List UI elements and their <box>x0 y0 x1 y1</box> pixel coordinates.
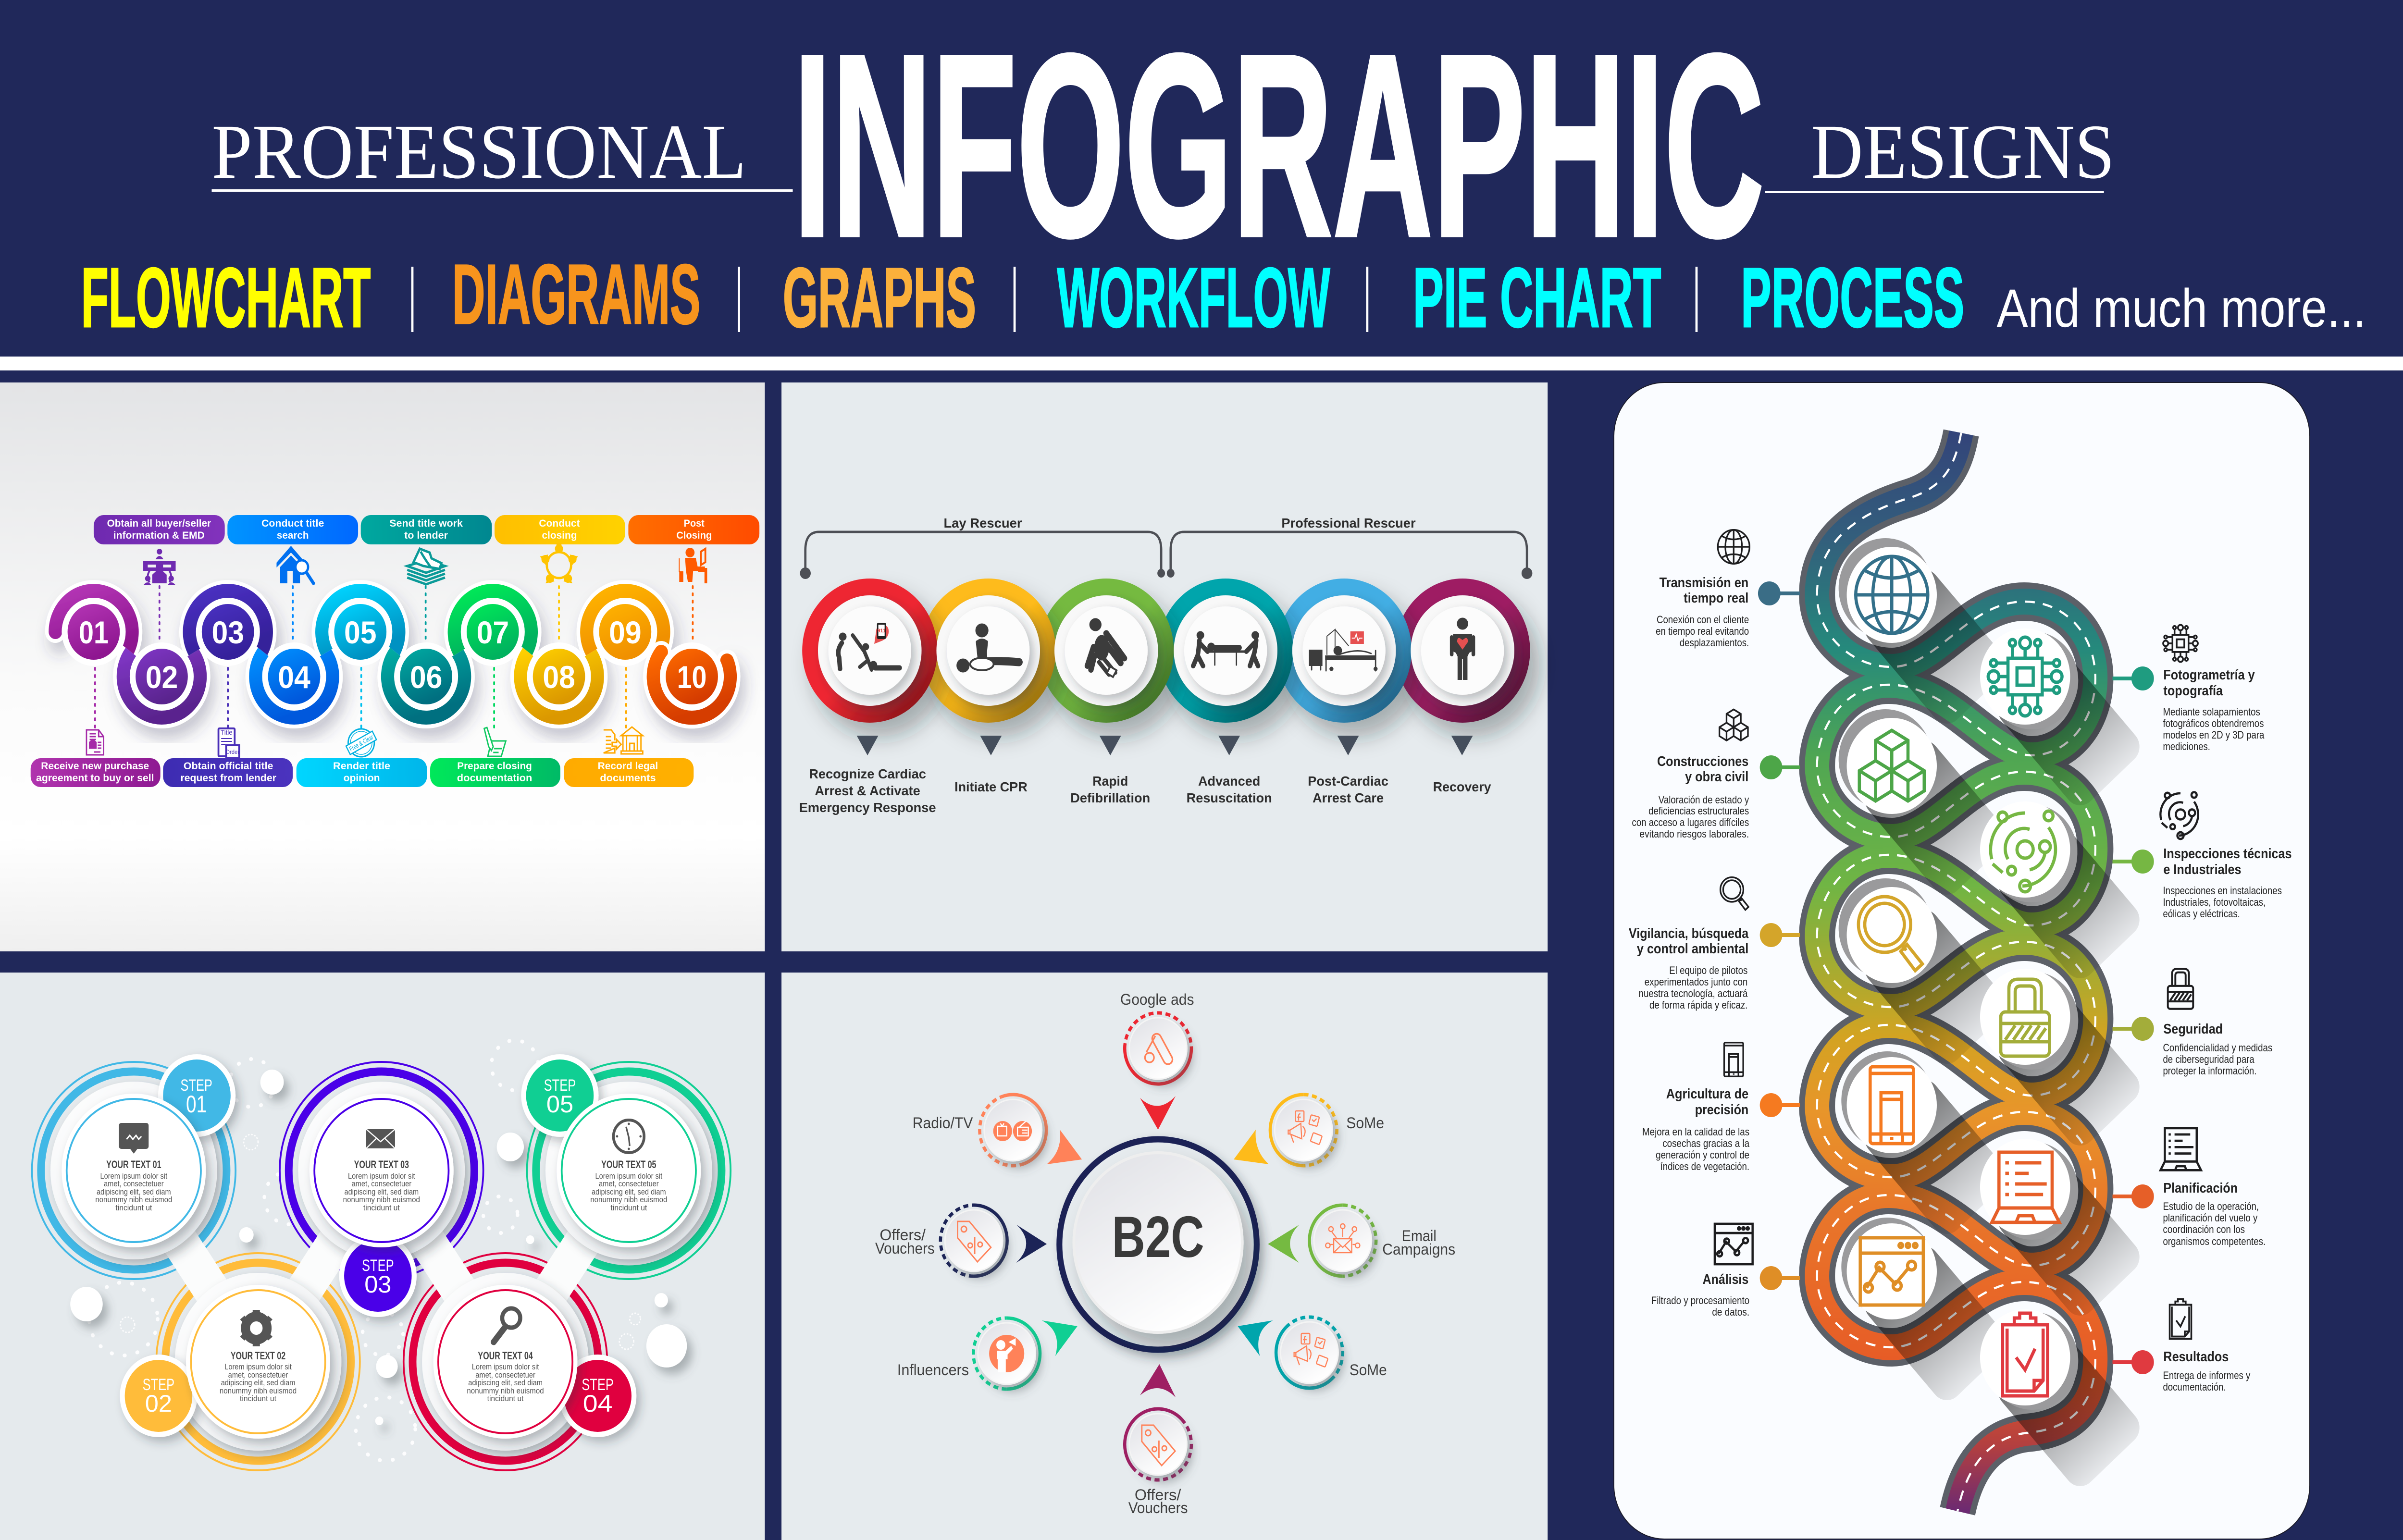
text: Inspecciones técnicas e Industriales: Industriales, fotovoltaicas, <box>2163 896 2266 908</box>
text: Inspecciones técnicas e Industriales: Inspecciones en instalaciones <box>2163 885 2282 897</box>
text: Fotogrametría y topografía: mediciones. <box>2163 740 2210 752</box>
text block 03: adipiscing elit, sed diam <box>344 1188 419 1196</box>
text: Transmisión en tiempo real: Transmisión en <box>1660 575 1748 590</box>
text block 05: adipiscing elit, sed diam <box>592 1188 666 1196</box>
step labels: Defibrillation <box>1070 790 1150 805</box>
icon: purchase agreement document <box>87 730 104 755</box>
badge labels <box>143 1076 614 1417</box>
text: Agricultura de precisión <box>1642 1086 1749 1172</box>
badge labels: 05 <box>546 1091 573 1118</box>
icon: padlock large <box>2001 979 2049 1056</box>
icon: globe large <box>1856 556 1928 633</box>
numbered step discs: 10 <box>677 659 706 695</box>
text block 03: amet, consectetuer <box>351 1180 412 1188</box>
icon: chat bubble <box>119 1123 149 1154</box>
text: Planificación: planificación del vuelo y <box>2163 1212 2258 1224</box>
panel: chain of survival <box>781 382 1548 951</box>
icon: rapid defibrillation <box>1087 618 1124 677</box>
bottom step pills: Prepare closing <box>457 761 532 772</box>
header banner <box>81 0 2366 345</box>
top step pills <box>94 515 759 544</box>
numbered step discs: 09 <box>609 615 642 650</box>
top step pills: Post <box>684 518 705 529</box>
top step pills: closing <box>542 530 577 541</box>
text: Vigilancia, búsqueda y control ambiental: Vigilancia, búsqueda <box>1629 925 1749 941</box>
badge labels: 01 <box>186 1091 207 1118</box>
text: Fotogrametría y topografía: Mediante solapamientos <box>2163 706 2260 718</box>
step labels: Arrest Care <box>1313 790 1384 805</box>
text block 01: nonummy nibh euismod <box>95 1195 172 1204</box>
text: Construcciones y obra civil: Construcciones <box>1657 753 1748 769</box>
channel labels: Offers/ <box>879 1226 926 1244</box>
numbered step discs: 03 <box>211 615 244 650</box>
icon: magnifier <box>494 1308 520 1342</box>
text block 01: Lorem ipsum dolor sit <box>100 1172 168 1181</box>
text block 05 <box>590 1158 667 1212</box>
text block 02: YOUR TEXT 02 <box>231 1350 285 1362</box>
text block 01: adipiscing elit, sed diam <box>97 1188 171 1196</box>
icon: chart large <box>1860 1238 1923 1305</box>
text block 04: adipiscing elit, sed diam <box>468 1379 543 1387</box>
panel: B2C channels <box>781 973 1548 1540</box>
white icon discs <box>1839 538 2078 1410</box>
text: Inspecciones técnicas e Industriales <box>2163 846 2292 920</box>
step labels: Initiate CPR <box>954 779 1028 794</box>
text: Transmisión en tiempo real: Conexión con el cliente <box>1657 614 1749 626</box>
down arrows <box>857 736 1473 755</box>
text: Agricultura de precisión: generación y control de <box>1656 1149 1749 1161</box>
bottom step pills: request from lender <box>180 773 276 784</box>
numbered step discs: 07 <box>477 615 509 650</box>
text block 04: YOUR TEXT 04 <box>478 1350 533 1362</box>
icon: house with magnifier <box>276 546 313 583</box>
text: Planificación: organismos competentes. <box>2163 1235 2266 1247</box>
decorative dots and dashed rings <box>70 1040 687 1461</box>
text block 02: amet, consectetuer <box>228 1371 288 1380</box>
icon: round table meeting <box>540 543 578 583</box>
icon: recovered person with heart <box>1452 618 1474 679</box>
panel: five step circles <box>0 973 765 1540</box>
text block 03: Lorem ipsum dolor sit <box>348 1172 415 1181</box>
text: Construcciones y obra civil <box>1632 753 1749 840</box>
icon: title and order documents <box>219 728 239 758</box>
text: Transmisión en tiempo real: en tiempo real evitando <box>1656 625 1749 637</box>
text: Construcciones y obra civil: y obra civil <box>1685 769 1748 784</box>
text block 05: amet, consectetuer <box>599 1180 659 1188</box>
central B2C hub <box>1059 1139 1257 1350</box>
icon: clipboard large <box>2003 1313 2048 1396</box>
text block 02 <box>220 1350 297 1403</box>
badge labels: STEP <box>582 1375 614 1393</box>
text block 02: tincidunt ut <box>240 1394 276 1403</box>
top step pills: Conduct title <box>261 518 324 529</box>
text: Agricultura de precisión: precisión <box>1695 1102 1748 1117</box>
channel labels: Influencers <box>897 1361 969 1379</box>
top step pills: to lender <box>404 530 448 541</box>
small outline icons <box>1715 530 2201 1339</box>
text: Vigilancia, búsqueda y control ambiental: experimentados junto con <box>1645 976 1747 988</box>
text: Agricultura de precisión: Agricultura de <box>1666 1086 1748 1101</box>
text: Resultados <box>2163 1349 2251 1393</box>
icon: magnifier large <box>1858 897 1922 971</box>
bottom step pills: documentation <box>457 773 532 784</box>
text: Resultados: documentación. <box>2163 1381 2226 1393</box>
text block 05: tincidunt ut <box>610 1204 647 1212</box>
text block 05: Lorem ipsum dolor sit <box>595 1172 663 1181</box>
icon: free and clear stamp: Free & Clear <box>348 733 375 753</box>
step labels: Resuscitation <box>1187 790 1272 805</box>
text: Transmisión en tiempo real <box>1656 575 1749 649</box>
step badges <box>120 1054 636 1437</box>
text: Fotogrametría y topografía: topografía <box>2163 683 2223 698</box>
text: Vigilancia, búsqueda y control ambiental: nuestra tecnología, actuará <box>1639 987 1747 999</box>
bottom step pills: documents <box>600 773 656 784</box>
text: Vigilancia, búsqueda y control ambiental: y control ambiental <box>1637 941 1748 956</box>
top step pills: search <box>277 530 309 541</box>
icon: stack of paper and money <box>407 549 445 584</box>
top step pills: Conduct <box>539 518 580 529</box>
bottom step pills: Obtain official title <box>184 761 273 772</box>
text: Agricultura de precisión: cosechas gracias a la <box>1662 1137 1749 1149</box>
icon: meeting over house <box>143 549 176 585</box>
badge labels: 02 <box>145 1391 172 1417</box>
text: Fotogrametría y topografía: modelos en 2D y 3D para <box>2163 729 2264 741</box>
badge labels: STEP <box>544 1076 576 1094</box>
text block 03 <box>343 1158 420 1212</box>
panel: road infographic card <box>1614 382 2310 1539</box>
badge labels: 04 <box>583 1391 613 1417</box>
text: Fotogrametría y topografía: fotográficos obtendremos <box>2163 717 2264 729</box>
text block 05: YOUR TEXT 05 <box>601 1158 656 1170</box>
coloured step rings <box>802 579 1530 723</box>
icon: orbit large <box>1991 811 2056 892</box>
text: Inspecciones técnicas e Industriales: e Industriales <box>2163 862 2242 877</box>
icon: title and order documents: Order <box>225 749 239 755</box>
badge labels: 03 <box>364 1271 391 1298</box>
icon: title and order documents: Title <box>221 729 233 736</box>
node: Influencers <box>973 1318 1040 1389</box>
step labels: Post-Cardiac <box>1308 773 1388 788</box>
white plates <box>818 595 1514 706</box>
numbered step discs <box>62 598 724 711</box>
text block 03: nonummy nibh euismod <box>343 1195 420 1204</box>
text block 04: Lorem ipsum dolor sit <box>472 1363 539 1371</box>
dotted leader lines <box>95 586 693 727</box>
text: Vigilancia, búsqueda y control ambiental <box>1629 925 1749 1011</box>
text: Análisis: de datos. <box>1712 1306 1749 1318</box>
text: Seguridad <box>2163 1021 2272 1077</box>
channel labels: Campaigns <box>1382 1241 1455 1258</box>
text block 04: amet, consectetuer <box>475 1371 535 1380</box>
category: WORKFLOW: WORKFLOW <box>1057 251 1330 345</box>
icon: gear <box>240 1310 273 1346</box>
text: Seguridad: de ciberseguridad para <box>2163 1053 2254 1065</box>
text: Seguridad: proteger la información. <box>2163 1065 2256 1077</box>
icon: clock <box>613 1120 644 1153</box>
text: Construcciones y obra civil: con acceso a lugares difíciles <box>1632 816 1749 828</box>
text: Inspecciones técnicas e Industriales: Inspecciones técnicas <box>2163 846 2292 861</box>
connector dots <box>1758 581 2154 1374</box>
icon: laptop large <box>1992 1152 2059 1222</box>
text block 02: nonummy nibh euismod <box>220 1387 297 1395</box>
node: Google ads <box>1125 1013 1191 1084</box>
text: Fotogrametría y topografía: Fotogrametría y <box>2163 667 2255 682</box>
text: Planificación: Estudio de la operación, <box>2163 1200 2259 1212</box>
panel: ten-step flowchart <box>0 382 765 951</box>
text: Planificación: coordinación con los <box>2163 1223 2245 1235</box>
inner white circles with outlines <box>62 1094 701 1439</box>
text block 04 <box>467 1350 544 1403</box>
step labels <box>799 766 1491 815</box>
icon: free and clear stamp <box>346 729 376 757</box>
category: DIAGRAMS: DIAGRAMS <box>452 247 700 342</box>
step labels: Rapid <box>1092 773 1128 788</box>
bottom step pills: Render title <box>333 761 390 772</box>
white connectors <box>134 1170 629 1362</box>
text: Seguridad: Confidencialidad y medidas <box>2163 1042 2272 1054</box>
text: Vigilancia, búsqueda y control ambiental: de forma rápida y eficaz. <box>1649 999 1747 1011</box>
text: Transmisión en tiempo real: desplazamientos. <box>1680 637 1749 649</box>
text: Transmisión en tiempo real: tiempo real <box>1684 590 1748 605</box>
icon: pen signing paper <box>484 727 506 756</box>
channel labels: Vouchers <box>875 1240 935 1257</box>
step labels: Recognize Cardiac <box>809 766 926 781</box>
channel labels: Vouchers <box>1128 1499 1188 1516</box>
icon: stretcher <box>1193 631 1259 666</box>
central B2C hub: B2C <box>1112 1205 1204 1270</box>
icon: cubes large <box>1859 730 1924 801</box>
bottom step pills: Record legal <box>598 761 658 772</box>
title right: DESIGNS: DESIGNS <box>1811 109 2115 195</box>
step labels: Emergency Response <box>799 800 936 815</box>
step labels: Recovery <box>1433 779 1491 794</box>
text: Construcciones y obra civil: deficiencias estructurales <box>1648 805 1749 817</box>
text block 03: YOUR TEXT 03 <box>354 1158 409 1170</box>
winding road <box>1817 433 2095 1511</box>
icon: person at desk <box>679 548 707 583</box>
node: SoMe upper <box>1270 1095 1337 1166</box>
category: FLOWCHART: FLOWCHART <box>81 251 371 345</box>
numbered step discs: 04 <box>278 659 310 695</box>
text block 04: nonummy nibh euismod <box>467 1387 544 1395</box>
icon: CPR <box>957 624 1019 672</box>
outer plates <box>50 1082 712 1451</box>
icon: recognize cardiac arrest <box>838 623 900 670</box>
bracket: lay rescuer: Lay Rescuer <box>943 515 1022 530</box>
channel labels: Radio/TV <box>913 1114 973 1132</box>
bracket: professional rescuer <box>1167 515 1532 579</box>
channel labels: SoMe <box>1346 1114 1384 1132</box>
text block 03: tincidunt ut <box>363 1204 400 1212</box>
category: GRAPHS: GRAPHS <box>783 251 976 345</box>
text block 04: tincidunt ut <box>487 1394 524 1403</box>
text: Agricultura de precisión: Mejora en la calidad de las <box>1642 1126 1749 1138</box>
text: Análisis <box>1651 1271 1749 1318</box>
step labels: Advanced <box>1198 773 1260 788</box>
channel labels: Email <box>1402 1227 1437 1244</box>
icon: tablet large <box>1870 1067 1913 1144</box>
bracket: professional rescuer: Professional Rescuer <box>1281 515 1416 530</box>
title left: PROFESSIONAL: PROFESSIONAL <box>211 109 746 195</box>
serpentine ring ribbon <box>55 591 730 717</box>
top step pills: Send title work <box>389 518 463 529</box>
text block 02: adipiscing elit, sed diam <box>221 1379 295 1387</box>
channel labels: Google ads <box>1120 991 1194 1008</box>
step labels: Arrest & Activate <box>815 783 920 798</box>
icon: recognize cardiac arrest: 911 <box>878 628 885 634</box>
text: Resultados: Resultados <box>2163 1349 2229 1364</box>
icon: document to court house <box>604 727 643 754</box>
text: Inspecciones técnicas e Industriales: eólicas y eléctricas. <box>2163 908 2240 920</box>
text: Seguridad: Seguridad <box>2163 1021 2223 1036</box>
node: Radio/TV <box>970 1084 1056 1176</box>
coloured double rings <box>32 1062 731 1470</box>
channel labels <box>875 991 1455 1516</box>
bottom step pills: opinion <box>344 773 380 784</box>
numbered step discs: 08 <box>543 659 575 695</box>
node: Offers/Vouchers bottom <box>1111 1394 1205 1495</box>
text: Planificación <box>2163 1180 2266 1247</box>
text: Resultados: Entrega de informes y <box>2163 1369 2251 1381</box>
top step pills: information & EMD <box>113 530 205 541</box>
text: Vigilancia, búsqueda y control ambiental: El equipo de pilotos <box>1669 964 1747 976</box>
text: Construcciones y obra civil: evitando riesgos laborales. <box>1639 828 1749 840</box>
badge labels: STEP <box>143 1375 174 1393</box>
text: Análisis: Filtrado y procesamiento <box>1651 1294 1749 1306</box>
numbered step discs: 02 <box>146 659 178 695</box>
text: Construcciones y obra civil: Valoración de estado y <box>1659 794 1749 806</box>
arrows to hub <box>1016 1096 1299 1397</box>
category: PROCESS: PROCESS <box>1741 251 1964 345</box>
tagline: And much more... <box>1997 279 2366 339</box>
category: PIE CHART: PIE CHART <box>1413 251 1661 345</box>
badge labels: STEP <box>362 1256 394 1274</box>
bottom step pills: agreement to buy or sell <box>36 773 154 784</box>
icon: envelope <box>366 1129 395 1148</box>
text block 05: nonummy nibh euismod <box>590 1195 667 1204</box>
badge labels: STEP <box>180 1076 212 1094</box>
node: Email Campaigns <box>1309 1205 1376 1276</box>
node: Offers/Vouchers left <box>941 1205 1007 1276</box>
text block 02: Lorem ipsum dolor sit <box>224 1363 292 1371</box>
white divider band <box>0 357 2403 370</box>
text: Planificación: Planificación <box>2163 1180 2238 1195</box>
channel labels: SoMe <box>1350 1361 1387 1379</box>
text block 01 <box>95 1158 172 1212</box>
node: SoMe lower <box>1262 1302 1357 1403</box>
text: Análisis: Análisis <box>1703 1271 1748 1287</box>
numbered step discs: 05 <box>344 615 377 650</box>
bottom step pills: Receive new purchase <box>41 761 149 772</box>
long shadows over road <box>1858 563 2146 1493</box>
text block 01: amet, consectetuer <box>104 1180 164 1188</box>
bracket: lay rescuer <box>800 515 1165 579</box>
channel labels: Offers/ <box>1135 1486 1181 1503</box>
numbered step discs: 06 <box>410 659 442 695</box>
text block 01: tincidunt ut <box>115 1204 152 1212</box>
text block 01: YOUR TEXT 01 <box>106 1158 161 1170</box>
icon: hospital care bed <box>1309 629 1377 671</box>
top step pills: Closing <box>676 530 712 541</box>
bottom step pills <box>31 758 694 787</box>
text: Agricultura de precisión: índices de vegetación. <box>1660 1160 1749 1172</box>
numbered step discs: 01 <box>79 615 109 650</box>
icon: chip large <box>1988 637 2062 716</box>
top step pills: Obtain all buyer/seller <box>107 518 211 529</box>
text: Fotogrametría y topografía <box>2163 667 2264 752</box>
